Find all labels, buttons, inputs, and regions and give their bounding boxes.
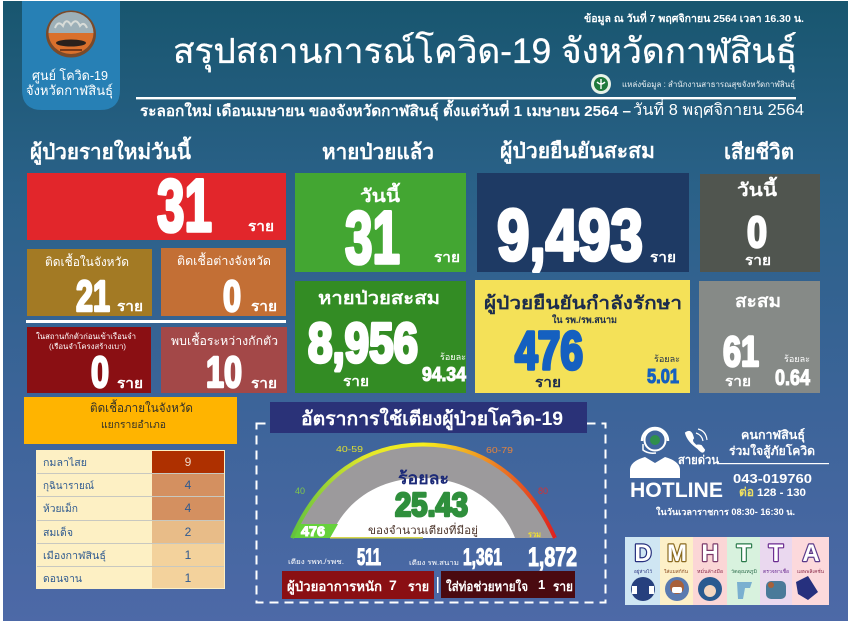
panel: deaths today: วันนี้ [737,176,779,200]
chart: occupancy gauge: 476 [301,523,325,539]
H measure: หมั่นล้างมือ [697,568,723,574]
row: Don Chan [43,571,192,585]
row: Somdet: 2 [185,525,192,539]
row: Huai Mek [43,501,192,515]
panel: infected in province: ติดเชื้อในจังหวัด [45,253,129,269]
data timestamp: ข้อมูล ณ วันที่ 7 พฤศจิกายน 2564 เวลา 16.30 น. [584,10,804,26]
subtitle: วันที่ 8 พฤศจิกายน 2564 [633,98,804,119]
heading: bed occupancy rate [270,402,587,433]
panel: provincial COVID centre logo [22,1,120,110]
bed counts [288,542,577,572]
panel: infected from other province: ราย [251,298,277,314]
panel: deaths today: 0 [747,208,767,257]
panel: found during quarantine [161,327,287,397]
D measure [631,540,655,601]
ventilator patients: 1 [538,577,545,592]
hotline: 128 - 130 [757,487,806,499]
row: Don Chan: 1 [185,571,192,585]
panel: cumulative confirmed: 9,493 [497,196,643,276]
T measure: temperature [731,540,757,599]
ventilator patients: ใส่ท่อช่วยหายใจ [446,578,528,594]
heading: bed occupancy rate: อัตราการใช้เตียงผู้ป่วยโควิด-19 [301,407,563,431]
panel: currently in treatment: 5.01 [647,366,679,388]
dashed frame: bed occupancy [256,424,606,602]
panel: infected in province: 21 [76,272,110,321]
panel: currently in treatment [475,280,690,393]
icon: telephone [686,429,707,452]
panel: quarantine before entering prison [27,327,151,397]
M measure [664,540,689,601]
panel: currently in treatment: ร้อยละ [654,354,680,364]
hotline: 043-019760 [733,471,812,486]
A measure: แอพพลิเคชั่น [797,568,824,574]
panel: infected from other province [161,248,286,321]
subtitle: ระลอกใหม่ เดือนเมษายน ของจังหวัดกาฬสินธุ์ ตั้งแต่วันที่ 1 เมษายน 2564 – [140,99,631,121]
panel: recovered today: วันนี้ [360,182,402,206]
hotline [630,428,829,517]
T measure: temperature: วัดอุณหภูมิ [731,569,757,575]
panel: cumulative deaths: ร้อยละ [784,354,810,364]
panel: new patients total: ราย [248,218,274,234]
row: Mueang Kalasin: เมืองกาฬสินธุ์ [43,550,106,562]
row: Kuchinarai: 4 [185,478,192,492]
panel: currently in treatment: ใน รพ./รพ.สนาม [552,314,617,326]
bed counts: 1,872 [528,542,577,572]
panel: in-province infections heading [24,397,237,444]
T measure: testing: T [769,540,784,567]
severe patients: ผู้ป่วยอาการหนัก [287,579,382,595]
icon: provincial seal [46,10,96,58]
panel: recovered today: ราย [434,249,460,265]
panel: in-province infections heading: ติดเชื้อภายในจังหวัด [90,399,193,415]
panel: in-province infections heading: แยกรายอำเภอ [101,420,166,431]
panel: currently in treatment: ราย [535,374,561,390]
panel: currently in treatment: 476 [515,321,583,381]
panel: cumulative deaths: 61 [723,328,759,376]
severe patients: ราย [408,579,429,594]
heading: cumulative confirmed: ผู้ป่วยยืนยันสะสม [500,139,655,165]
panel: cumulative deaths [699,281,820,393]
title: สรุปสถานการณ์โควิด-19 จังหวัดกาฬสินธุ์ [173,31,797,72]
row: Mueang Kalasin [43,548,192,562]
panel: infected in province [27,249,152,321]
H measure [697,540,723,601]
bed counts: 511 [357,544,381,571]
chart: occupancy gauge: ของจำนวนเตียงที่มีอยู่ [368,522,478,537]
row: Mueang Kalasin: 1 [185,548,192,562]
chart: occupancy gauge: ร้อยละ [398,469,449,488]
panel: quarantine before entering prison: ราย [117,375,143,391]
D measure: D [634,540,652,567]
panel: found during quarantine: ราย [251,375,277,391]
row: Kamalasai [43,455,192,469]
panel: found during quarantine: 10 [206,348,242,397]
hotline: HOTLINE [630,479,723,502]
icon: health ministry emblem [591,74,611,94]
D measure: อยู่ห่างไว้ [634,569,652,575]
row: Huai Mek: 4 [185,501,192,515]
panel: cumulative recovered: หายป่วยสะสม [318,288,440,308]
row: Kuchinarai [43,478,192,492]
T measure: temperature: T [737,540,752,567]
panel: deaths today [700,174,820,272]
panel: infected from other province: 0 [223,272,241,321]
gauge scale labels: 40-59 [336,445,364,454]
panel: found during quarantine: พบเชื้อระหว่างกักตัว [171,332,278,348]
hotline: ในวันเวลาราชการ 08:30- 16:30 น. [656,506,795,517]
panel: quarantine before entering prison: (เรือนจำโครงสร้างเบา) [49,342,127,351]
row: Huai Mek: ห้วยเม็ก [43,501,78,515]
A measure [796,540,824,600]
panel: deaths today: ราย [745,252,771,268]
panel: cumulative recovered: ร้อยละ [440,352,466,362]
gauge scale labels [295,445,548,539]
ventilator patients: ราย [553,579,573,594]
T measure: testing: ตรวจหาเชื้อ [763,568,789,574]
row: Kamalasai: กมลาไสย [43,457,87,469]
subtitle [140,98,804,121]
bed counts: เตียง รพท./รพช. [288,558,344,566]
panel: cumulative recovered: ราย [343,373,369,389]
panel: new patients total: 31 [157,164,212,247]
panel: cumulative confirmed [477,173,689,276]
row: Kamalasai: 9 [185,455,192,469]
icon: call agent [630,428,680,478]
panel: quarantine before entering prison: 0 [91,348,109,397]
T measure: testing [763,540,789,599]
logo caption: ศูนย์ โควิด-19 [32,68,108,84]
heading: new patients today: ผู้ป่วยรายใหม่วันนี้ [30,136,192,166]
panel: cumulative recovered: 8,956 [308,311,418,374]
severe patients [282,571,434,599]
bed counts: เตียง รพ.สนาม [409,559,459,567]
ventilator patients [441,571,575,598]
chart: occupancy gauge: 25.43 [395,486,468,523]
panel: new patients total [27,164,286,247]
gauge scale labels: รวม [528,530,541,539]
panel: cumulative recovered: 94.34 [422,364,467,386]
logo caption [26,68,113,99]
gauge scale labels: 40 [295,486,305,496]
panel: DMHTTA measures [625,537,829,605]
panel: currently in treatment: ผู้ป่วยยืนยันกำลังรักษา [484,293,682,315]
heading: deaths: เสียชีวิต [724,140,794,164]
table: infections by district [36,450,225,589]
panel: infected in province: ราย [117,298,143,314]
H measure: H [701,540,719,567]
row: Somdet [43,525,192,539]
heading: recovered: หายป่วยแล้ว [322,140,434,164]
row: Kuchinarai: กุฉินารายณ์ [43,480,94,492]
panel: cumulative confirmed: ราย [650,249,676,265]
A measure: A [802,540,820,567]
hotline: สายด่วน [678,453,720,467]
panel: cumulative deaths: ราย [725,373,751,389]
panel: recovered today [295,173,466,279]
hotline: ร่วมใจสู้ภัยโควิด [729,443,815,459]
chart: occupancy gauge [291,443,556,539]
panel: infected from other province: ติดเชื้อต่างจังหวัด [177,252,271,268]
gauge scale labels: 60-79 [486,446,514,455]
panel: cumulative deaths: สะสม [735,291,781,311]
panel: quarantine before entering prison: ในสถานกักตัวก่อนเข้าเรือนจำ [36,332,136,341]
M measure: M [667,540,687,567]
bed counts: 1,361 [463,544,502,571]
row: Don Chan: ดอนจาน [43,574,82,585]
row: Somdet: สมเด็จ [43,525,73,539]
panel: cumulative deaths: 0.64 [775,365,811,390]
panel: recovered today: 31 [345,196,400,279]
gauge scale labels: 80 [538,486,548,496]
severe patients: 7 [389,577,397,593]
logo caption: จังหวัดกาฬสินธุ์ [26,83,113,99]
M measure: ใส่แมสก์กัน [664,568,688,574]
hotline: คนกาฬสินธุ์ [741,428,805,443]
data source: แหล่งข้อมูล : สำนักงานสาธารณสุขจังหวัดกาฬสินธุ์ [622,79,795,90]
hotline: ต่อ [739,485,754,499]
panel: cumulative recovered [295,281,467,393]
